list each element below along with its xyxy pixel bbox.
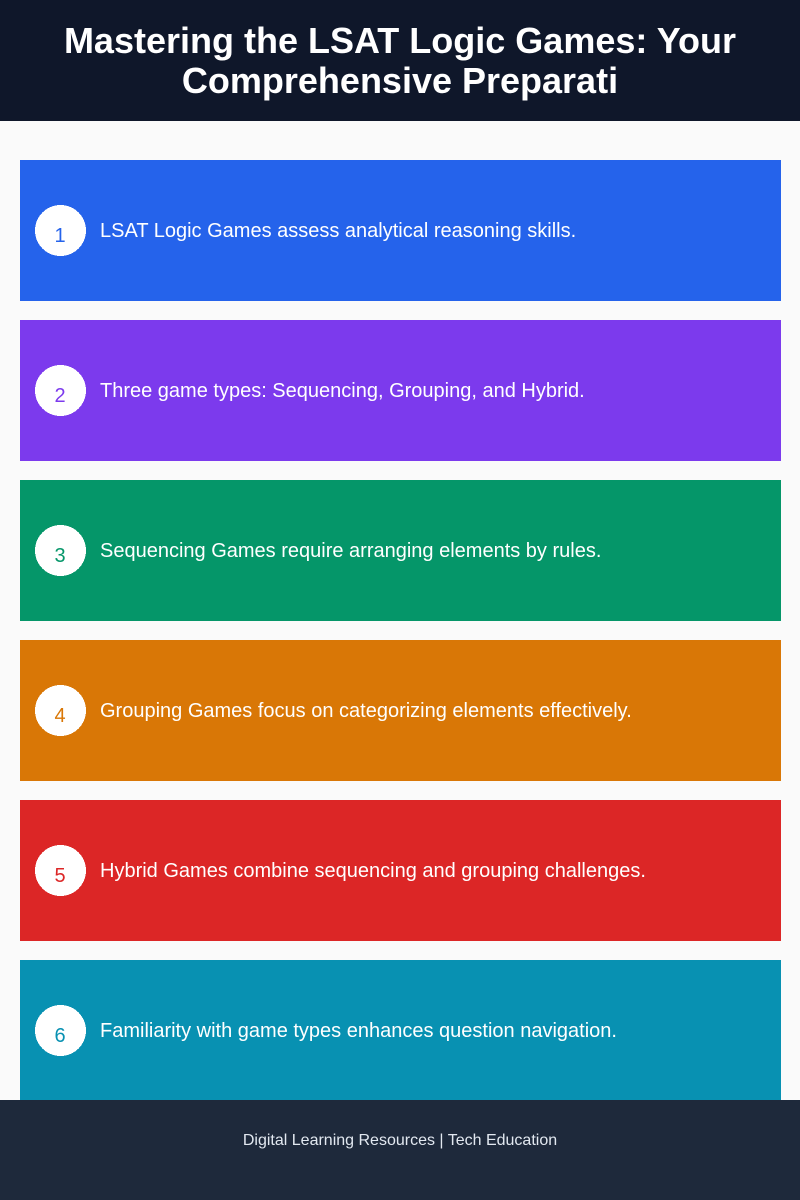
panel: point 4 <box>20 640 781 781</box>
title: Comprehensive Preparati <box>182 60 618 101</box>
footer text: Digital Learning Resources | Tech Education <box>243 1132 557 1149</box>
icon: number badge 1 <box>35 205 86 256</box>
icon: number badge 1: 1 <box>54 225 66 247</box>
icon: number badge 2: 2 <box>54 385 66 407</box>
icon: number badge 4: 4 <box>54 705 66 727</box>
text: point 3: Sequencing Games require arranging elements by rules. <box>100 540 601 562</box>
text: point 6: Familiarity with game types enhances question navigation. <box>100 1020 617 1042</box>
title: Mastering the LSAT Logic Games: Your <box>64 20 736 61</box>
icon: number badge 6: 6 <box>54 1025 66 1047</box>
panel: point 2 <box>20 320 781 461</box>
icon: number badge 3: 3 <box>54 545 66 567</box>
icon: number badge 5: 5 <box>54 865 66 887</box>
panel: point 1 <box>20 160 781 301</box>
panel: point 5 <box>20 800 781 941</box>
panel: point 6 <box>20 960 781 1101</box>
text: point 2: Three game types: Sequencing, Grouping, and Hybrid. <box>100 380 585 402</box>
header banner <box>0 0 800 121</box>
panel: point 3 <box>20 480 781 621</box>
text: point 5: Hybrid Games combine sequencing and grouping challenges. <box>100 860 646 882</box>
icon: number badge 3 <box>35 525 86 576</box>
footer bar <box>0 1100 800 1200</box>
icon: number badge 2 <box>35 365 86 416</box>
text: point 4: Grouping Games focus on categorizing elements effectively. <box>100 700 632 722</box>
text: point 1: LSAT Logic Games assess analytical reasoning skills. <box>100 220 576 242</box>
icon: number badge 5 <box>35 845 86 896</box>
icon: number badge 6 <box>35 1005 86 1056</box>
icon: number badge 4 <box>35 685 86 736</box>
